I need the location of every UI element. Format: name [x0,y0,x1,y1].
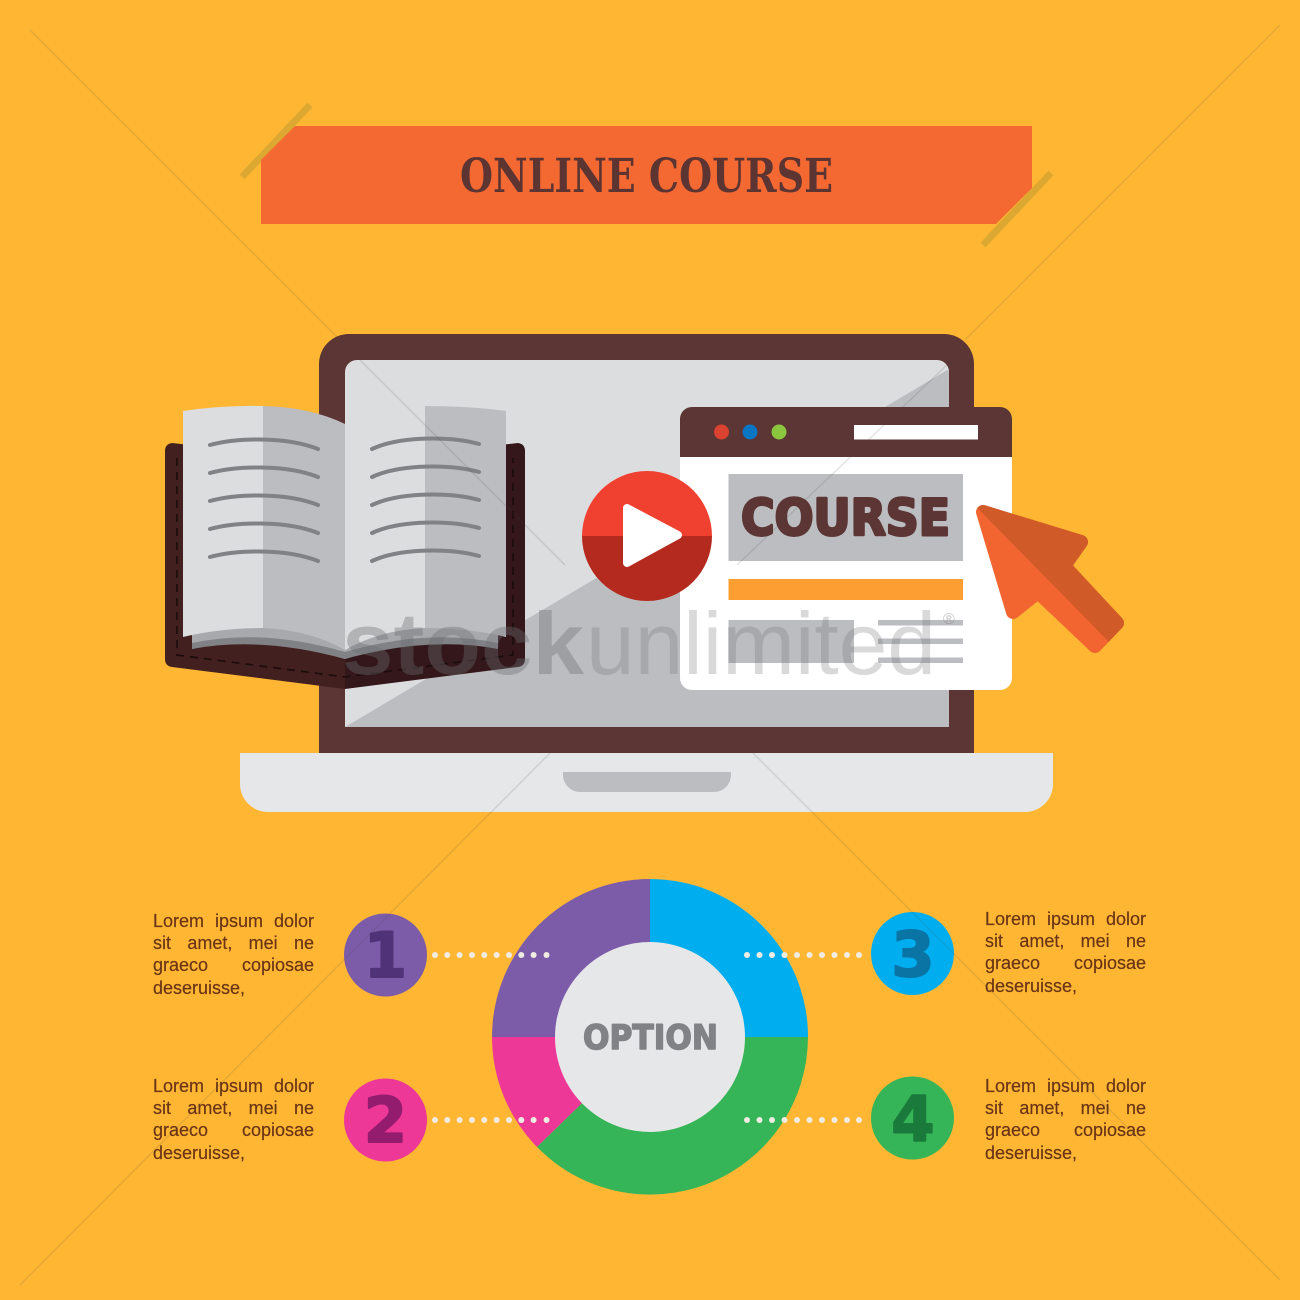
option label: OPTION [583,1018,718,1058]
text block 4: graeco copiosae [985,1120,1146,1140]
badge 1: 1 [364,919,407,992]
text block 1: graeco copiosae [153,955,314,975]
text block 3: sit amet, mei ne [985,931,1146,951]
icon: open book [165,406,525,689]
badge 3 [871,912,954,995]
text block 1: deseruisse, [153,978,245,998]
text block 4 [985,1076,1146,1163]
text block 2: deseruisse, [153,1143,245,1163]
badge 2: 2 [364,1084,407,1157]
badge 1 [344,914,427,996]
text block 1: sit amet, mei ne [153,933,314,953]
watermark: stock [342,594,585,693]
text block 1: Lorem ipsum dolor [153,911,314,931]
text block 4: Lorem ipsum dolor [985,1076,1146,1096]
text block 2: Lorem ipsum dolor [153,1076,314,1096]
badge 4: 4 [891,1083,935,1156]
book text lines [210,439,479,561]
course label: COURSE [741,489,950,547]
title banner [242,105,1051,245]
text block 2 [153,1076,314,1163]
icon: play button [582,471,712,601]
text block 3 [985,909,1146,996]
browser window [680,407,1012,690]
text block 2: graeco copiosae [153,1120,314,1140]
text block 3: Lorem ipsum dolor [985,909,1146,929]
text block 3: deseruisse, [985,976,1077,996]
icon: cursor arrow [983,512,1117,646]
text block 1 [153,911,314,998]
badge 4 [871,1076,954,1160]
text block 3: graeco copiosae [985,953,1146,973]
donut chart [492,879,808,1195]
watermark: unlimited [586,594,936,693]
badge 2 [344,1078,427,1162]
watermark: ® [943,611,955,628]
dotted connectors [432,952,862,1123]
title: ONLINE COURSE [460,148,833,203]
text block 4: sit amet, mei ne [985,1098,1146,1118]
text block 2: sit amet, mei ne [153,1098,314,1118]
badge 3: 3 [891,918,935,991]
text block 4: deseruisse, [985,1143,1077,1163]
laptop [240,334,1053,812]
